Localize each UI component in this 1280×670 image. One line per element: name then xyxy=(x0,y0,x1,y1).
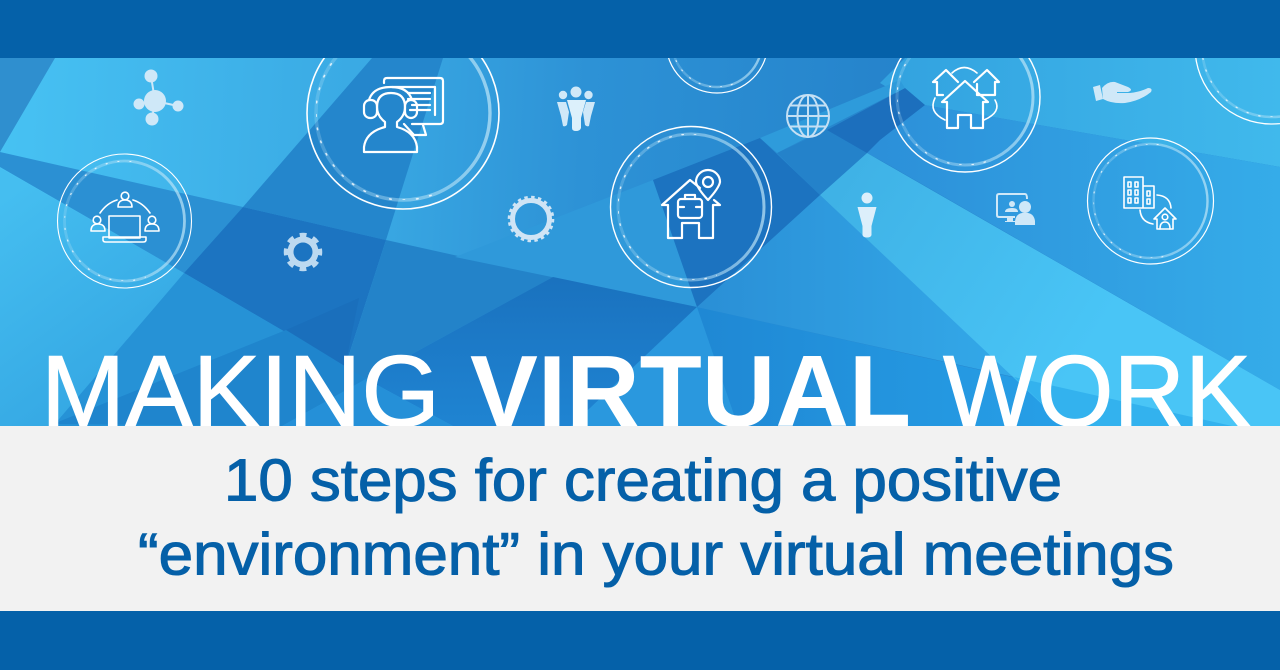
icon: presenter at screen xyxy=(997,194,1035,225)
subtitle xyxy=(138,448,1174,588)
title: Making Virtual Work xyxy=(41,336,1251,448)
circle icon: remote team around laptop xyxy=(58,154,192,288)
circle icon: office to home xyxy=(1088,138,1214,264)
icon: globe xyxy=(787,95,829,137)
circle icon: headset agent at computer xyxy=(306,58,500,210)
subtitle: “environment” in your virtual meetings xyxy=(138,522,1174,588)
title: Making Virtual Work: MAKING xyxy=(41,336,440,448)
header band xyxy=(0,0,1280,58)
subtitle: 10 steps for creating a positive xyxy=(224,448,1062,514)
icon: group of people xyxy=(557,86,595,131)
panel: subtitle background xyxy=(0,426,1280,611)
icon: gear ring centre xyxy=(509,197,553,241)
icon: person xyxy=(858,192,876,238)
panel: geometric blue background xyxy=(0,58,1280,428)
title: Making Virtual Work: VIRTUAL xyxy=(470,336,911,448)
circle icon: top right partial ring xyxy=(1195,58,1280,125)
circle icon: connected houses xyxy=(889,58,1041,173)
circle icon: top centre partial ring xyxy=(668,58,766,94)
title: Making Virtual Work: WORK xyxy=(943,336,1251,448)
icon: gear left xyxy=(286,235,320,269)
icon: network nodes xyxy=(134,70,184,126)
circle icon: home office with location pin xyxy=(610,126,772,288)
footer band xyxy=(0,611,1280,670)
icon: open hand xyxy=(1093,82,1152,103)
